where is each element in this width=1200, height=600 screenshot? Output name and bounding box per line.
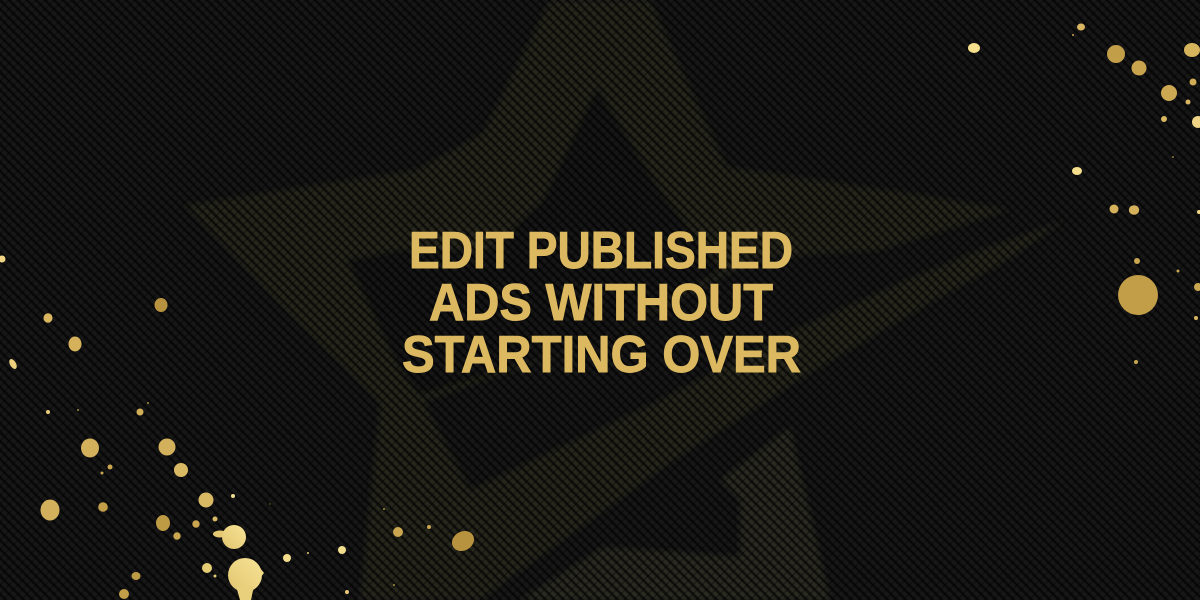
gold splatter: top right (968, 24, 1200, 175)
heading (402, 222, 801, 384)
gold splatter: bottom left (40, 402, 349, 600)
gold splatter: bottom centre (383, 508, 478, 586)
heading: STARTING OVER (402, 326, 801, 384)
heading: ADS WITHOUT (429, 274, 773, 332)
faint star watermark (185, 0, 1065, 600)
gold splatter: right middle (1110, 204, 1200, 364)
heading: EDIT PUBLISHED (409, 222, 793, 280)
gold splatter: left (0, 256, 168, 370)
